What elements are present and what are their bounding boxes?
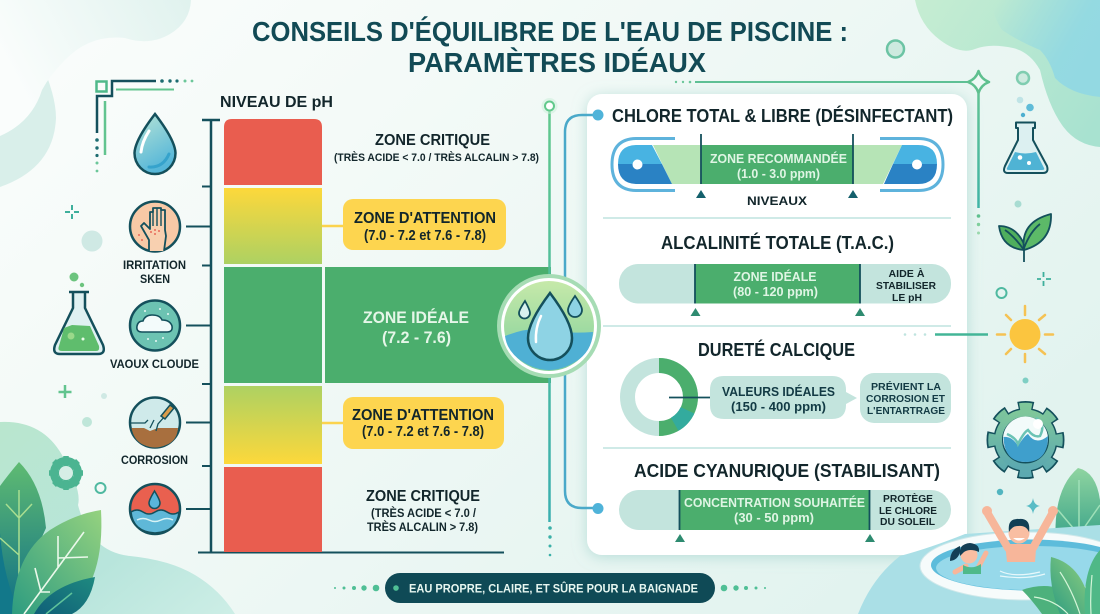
section: alcalinité: AIDE À (888, 267, 925, 280)
icon: water drop (134, 114, 176, 174)
critical zone top: (TRÈS ACIDE < 7.0 / TRÈS ALCALIN > 7.8) (334, 151, 539, 164)
decorative line and sparkle right (675, 40, 989, 234)
connector: green vertical line (542, 98, 558, 556)
label: vaoux cloude: VAOUX CLOUDE (110, 359, 199, 371)
swimmer: child (950, 543, 1045, 578)
section: dureté calcique (628, 339, 951, 428)
section: dureté calcique: DURETÉ CALCIQUE (698, 339, 855, 360)
swimmer: adult (982, 506, 1058, 562)
section: alcalinité: ALCALINITÉ TOTALE (T.A.C.) (661, 232, 894, 253)
icon: gear small (49, 456, 83, 490)
label: corrosion: CORROSION (121, 455, 188, 467)
section: chlore (612, 105, 953, 208)
icon: corrosion (130, 398, 180, 448)
icon: flask right (1004, 72, 1048, 173)
section: acide cyanurique: CONCENTRATION SOUHAITÉE (684, 495, 865, 510)
gauge recommended zone: ZONE RECOMMANDÉE (710, 151, 847, 166)
title: PARAMÈTRES IDÉAUX (408, 47, 706, 78)
central water badge (497, 274, 601, 378)
section: alcalinité: LE pH (892, 292, 922, 304)
ideal zone: (7.2 - 7.6) (382, 329, 451, 347)
label: irritation skin (123, 260, 186, 286)
callout: prévient corrosion: CORROSION ET (866, 393, 946, 405)
donut chart (628, 366, 710, 428)
section: acide cyanurique: DU SOLEIL (880, 516, 936, 528)
connector: line to sun (904, 333, 988, 336)
footer banner (334, 573, 766, 603)
water ground (858, 525, 1100, 614)
callout: valeurs idéales (710, 376, 857, 419)
ideal zone: ZONE IDÉALE (363, 308, 469, 327)
footer banner: EAU PROPRE, CLAIRE, ET SÛRE POUR LA BAIGNADE (409, 580, 698, 596)
icon: gear with wave (992, 378, 1060, 474)
icon: sprout right (999, 200, 1051, 262)
gauge light band (653, 145, 902, 184)
callout: prévient corrosion (860, 373, 951, 423)
section: acide cyanurique: LE CHLORE (879, 505, 937, 517)
icon: cloud (130, 300, 180, 350)
label: irritation skin: IRRITATION (123, 260, 186, 272)
icon: flask left (54, 272, 104, 354)
attention zone bottom: ZONE D'ATTENTION (352, 407, 494, 424)
section: alcalinité (619, 232, 951, 316)
label: irritation skin: SKEN (140, 274, 170, 286)
icon: sun (997, 306, 1053, 362)
icon: irritated hand (130, 202, 180, 252)
callout: valeurs idéales: (150 - 400 ppm) (731, 399, 826, 414)
card panel (587, 94, 967, 555)
decorative cross and ring right (996, 272, 1051, 298)
callout: prévient corrosion: PRÉVIENT LA (871, 380, 941, 393)
icon: left gauge cap (612, 138, 675, 190)
callout: prévient corrosion: L'ENTARTRAGE (867, 405, 945, 417)
corner ornament top left (95, 79, 193, 172)
section: acide cyanurique: (30 - 50 ppm) (734, 511, 814, 525)
title (252, 16, 848, 78)
gauge recommended zone (701, 134, 853, 184)
critical zone bottom (366, 488, 480, 534)
ideal zone (325, 267, 551, 383)
leaves bottom right foreground (1022, 550, 1100, 614)
icon: right gauge cap (880, 138, 943, 190)
callout: valeurs idéales: VALEURS IDÉALES (722, 384, 835, 399)
section: acide cyanurique: ACIDE CYANURIQUE (STABILISANT) (634, 460, 940, 481)
heading: niveau de pH: NIVEAU DE pH (220, 94, 333, 111)
pH scale bar (224, 119, 322, 552)
connector: blue line to card (565, 110, 604, 514)
critical zone top: ZONE CRITIQUE (375, 132, 490, 149)
attention zone bottom: (7.0 - 7.2 et 7.6 - 7.8) (362, 424, 484, 440)
section: alcalinité: ZONE IDÉALE (734, 269, 816, 284)
gauge recommended zone: (1.0 - 3.0 ppm) (737, 167, 820, 181)
section: alcalinité: STABILISER (876, 280, 936, 292)
pool with swimmers (920, 506, 1100, 600)
attention zone top: (7.0 - 7.2 et 7.6 - 7.8) (364, 228, 486, 244)
section: acide cyanurique: PROTÈGE (883, 492, 933, 505)
critical zone bottom: ZONE CRITIQUE (366, 488, 480, 505)
critical zone top (334, 132, 539, 164)
title: CONSEILS D'ÉQUILIBRE DE L'EAU DE PISCINE : (252, 16, 848, 47)
icon: drop over water (130, 484, 180, 534)
attention zone bottom (322, 397, 504, 449)
section: acide cyanurique (619, 460, 951, 542)
decorative small shapes left (58, 205, 107, 493)
section: chlore: CHLORE TOTAL & LIBRE (DÉSINFECTANT) (612, 105, 953, 126)
critical zone bottom: TRÈS ALCALIN > 7.8) (367, 521, 478, 534)
section: chlore: NIVEAUX (747, 194, 807, 208)
leaves bottom right background (1055, 468, 1100, 550)
attention zone top: ZONE D'ATTENTION (354, 210, 496, 227)
critical zone bottom: (TRÈS ACIDE < 7.0 / (371, 507, 477, 520)
icon: leaves bottom left (0, 462, 101, 614)
decorative dot and sparkle (997, 489, 1040, 514)
attention zone top (322, 199, 506, 250)
pH axis (186, 120, 504, 552)
section: alcalinité: (80 - 120 ppm) (733, 285, 818, 299)
